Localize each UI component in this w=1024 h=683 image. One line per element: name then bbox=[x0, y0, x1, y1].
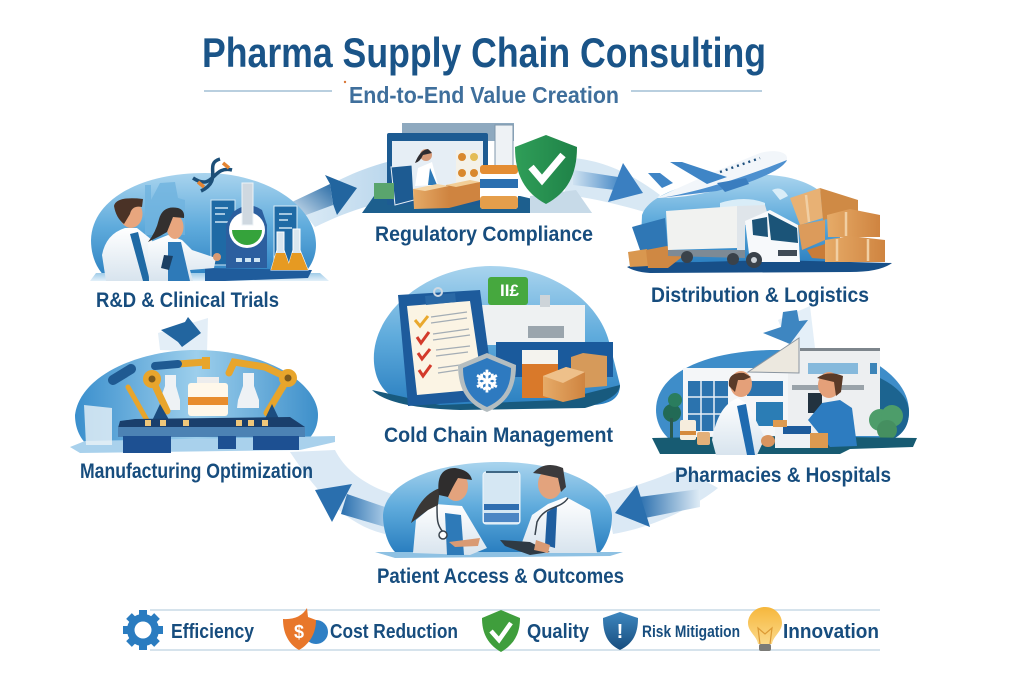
label: Patient Access & Outcomes bbox=[377, 565, 624, 588]
wall bbox=[84, 405, 112, 445]
label: Manufacturing Optimization bbox=[80, 460, 313, 483]
green sign bbox=[488, 277, 528, 305]
boxes bbox=[543, 353, 607, 402]
documents bbox=[211, 200, 297, 266]
conveyor bbox=[118, 417, 305, 453]
icon: cost shield bbox=[283, 608, 328, 650]
subtitle: End-to-End Value Creation bbox=[349, 82, 619, 108]
airplane bbox=[648, 151, 787, 198]
back window bbox=[402, 123, 514, 141]
ground bbox=[627, 260, 892, 273]
snowflake shield bbox=[458, 353, 516, 412]
medicine bottles bbox=[680, 420, 710, 445]
factory bbox=[478, 295, 585, 345]
label: Distribution & Logistics bbox=[651, 284, 869, 307]
panel: Manufacturing Optimization bbox=[70, 350, 335, 483]
panel: Pharmacies & Hospitals bbox=[652, 338, 917, 487]
robot joints bbox=[143, 357, 297, 425]
city silhouette bbox=[145, 182, 185, 235]
document stack bbox=[495, 125, 513, 167]
striped barrel bbox=[480, 165, 518, 209]
truck bbox=[666, 205, 800, 268]
icon: risk shield: ! bbox=[617, 621, 623, 643]
platform bbox=[362, 196, 592, 213]
blob background bbox=[91, 173, 316, 281]
male doctor bbox=[500, 465, 597, 555]
label: risk mitigation: Risk Mitigation bbox=[642, 622, 740, 641]
green box bbox=[374, 183, 394, 199]
tablet bbox=[391, 165, 414, 205]
label: Cold Chain Management bbox=[384, 424, 613, 447]
blob background bbox=[383, 462, 612, 552]
base shadow bbox=[372, 385, 620, 410]
blob background bbox=[75, 350, 318, 447]
snowflake shield: ❄ bbox=[474, 366, 500, 399]
base strip bbox=[90, 273, 329, 281]
lab bench bbox=[205, 268, 312, 281]
icon: cost shield: $ bbox=[294, 622, 304, 642]
arrow: Patient to Manufacturing bbox=[290, 450, 392, 534]
robot arms bbox=[113, 362, 288, 422]
label: Pharmacies & Hospitals bbox=[675, 464, 891, 487]
green sign: II£ bbox=[500, 281, 519, 300]
label: Regulatory Compliance bbox=[375, 223, 593, 246]
orange flasks bbox=[271, 229, 308, 270]
blue crates bbox=[632, 218, 668, 250]
label: innovation: Innovation bbox=[783, 621, 879, 643]
arrow: Distribution to Pharmacies bbox=[763, 306, 815, 350]
orange container bbox=[522, 350, 558, 398]
icon: gear bbox=[123, 610, 163, 650]
female scientist bbox=[148, 207, 221, 281]
benefits bar bbox=[123, 607, 880, 652]
ground bbox=[652, 436, 917, 454]
label: quality: Quality bbox=[527, 621, 590, 643]
trees bbox=[663, 393, 903, 440]
green check shield bbox=[515, 135, 577, 204]
analyst bbox=[415, 149, 438, 186]
icon: light bulb bbox=[748, 607, 782, 651]
icon: risk shield bbox=[603, 612, 638, 650]
clipboard bbox=[398, 288, 495, 406]
building bbox=[683, 338, 880, 440]
arrow: Regulatory to Distribution bbox=[560, 158, 660, 213]
monitor bbox=[387, 133, 488, 205]
male scientist bbox=[102, 198, 158, 281]
lab flask bbox=[226, 183, 267, 268]
cardboard boxes bbox=[413, 180, 480, 209]
package bbox=[761, 420, 828, 448]
title: Pharma Supply Chain Consulting bbox=[202, 29, 766, 76]
stacked boxes bbox=[790, 188, 885, 262]
panel: R&D & Clinical Trials bbox=[90, 159, 329, 312]
light wedge bbox=[530, 190, 592, 213]
blob background bbox=[374, 266, 620, 407]
left boxes bbox=[628, 246, 682, 268]
clouds bbox=[720, 188, 788, 210]
panel: Regulatory Compliance bbox=[362, 123, 593, 246]
blob background bbox=[656, 350, 909, 445]
female doctor bbox=[411, 468, 487, 555]
label: R&D & Clinical Trials bbox=[96, 289, 279, 312]
blue block bbox=[496, 342, 613, 377]
teal right shading bbox=[880, 378, 909, 443]
arrow: Manufacturing to R&D bbox=[158, 317, 208, 352]
arrow: Pharmacies to Patient bbox=[605, 468, 718, 534]
label: efficiency: Efficiency bbox=[171, 621, 255, 643]
DNA icon bbox=[193, 159, 232, 191]
label: cost reduction: Cost Reduction bbox=[330, 621, 458, 643]
arrow: R&D to Regulatory bbox=[292, 160, 395, 227]
bottles bbox=[160, 373, 259, 416]
icon: quality shield bbox=[482, 610, 520, 652]
base strip bbox=[375, 552, 623, 558]
panel: Patient Access & Outcomes bbox=[375, 462, 624, 588]
IV bag bbox=[483, 472, 520, 524]
panel: Cold Chain Management bbox=[372, 266, 620, 447]
base strip bbox=[70, 436, 335, 453]
panel: Distribution & Logistics bbox=[627, 151, 892, 307]
blob background bbox=[640, 175, 840, 265]
customer bbox=[808, 372, 857, 447]
pharmacist bbox=[712, 371, 765, 455]
